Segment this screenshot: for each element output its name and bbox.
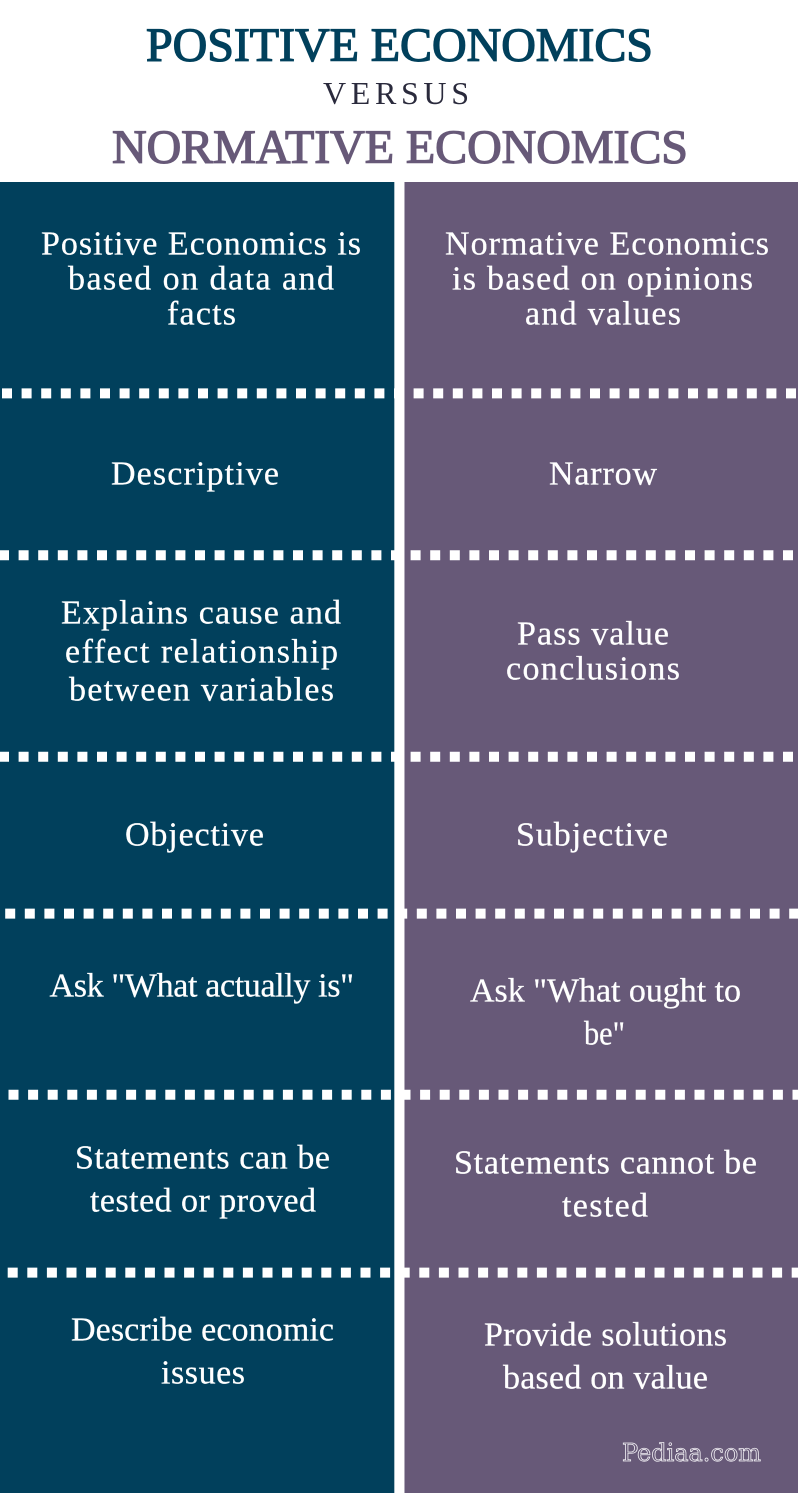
row 1 left: basis: facts — [167, 296, 236, 333]
row 7 left: economic issues: Describe economic — [71, 1312, 334, 1349]
row 5 right: what ought to be: be" — [584, 1016, 625, 1053]
panel: normative economics column — [404, 182, 798, 1493]
row 3 right: value conclusions: Pass value — [517, 616, 669, 653]
versus label: VERSUS — [323, 75, 469, 111]
row 3 left: cause and effect: effect relationship — [65, 634, 338, 671]
row 3 left: cause and effect: Explains cause and — [61, 595, 341, 632]
row 2 right: narrow: Narrow — [549, 456, 657, 493]
title: Positive Economics: POSITIVE ECONOMICS — [146, 19, 653, 72]
row 5 right: what ought to be — [470, 973, 741, 1053]
logo: Pediaa.com: Pediaa.com — [622, 1439, 761, 1467]
row 1 right: basis: and values — [525, 296, 681, 333]
row 4 left: objective: Objective — [125, 817, 264, 854]
row 5 right: what ought to be: Ask "What ought to — [470, 973, 741, 1010]
row 6 left: tested or proved: Statements can be — [75, 1140, 330, 1177]
row 7 right: solutions: Provide solutions — [484, 1317, 727, 1354]
row 1 left: basis: Positive Economics is — [41, 226, 361, 263]
row 6 left: tested or proved: tested or proved — [90, 1183, 316, 1220]
row 1 right: basis: Normative Economics — [445, 226, 769, 263]
row 2 left: descriptive: Descriptive — [111, 456, 279, 493]
title: Normative Economics: NORMATIVE ECONOMICS — [112, 121, 688, 174]
panel: positive economics column — [0, 182, 394, 1493]
row 6 left: tested or proved — [75, 1140, 330, 1220]
row 5 left: what actually is: Ask "What actually is" — [50, 968, 354, 1005]
row 6 right: cannot be tested: Statements cannot be — [454, 1145, 757, 1182]
row 7 right: solutions: based on value — [503, 1360, 708, 1397]
right column text — [445, 226, 769, 1397]
row 3 left: cause and effect — [61, 595, 341, 709]
row 3 right: value conclusions — [506, 616, 680, 688]
row 7 left: economic issues: issues — [161, 1355, 245, 1392]
row 1 left: basis: based on data and — [68, 261, 334, 298]
row 4 right: subjective: Subjective — [516, 817, 668, 854]
row 1 left: basis — [41, 226, 361, 333]
row 1 right: basis — [445, 226, 769, 333]
row 6 right: cannot be tested: tested — [562, 1188, 648, 1225]
row 3 right: value conclusions: conclusions — [506, 651, 680, 688]
row 7 right: solutions — [484, 1317, 727, 1397]
row 3 left: cause and effect: between variables — [69, 672, 334, 709]
left column text — [41, 226, 361, 1392]
row 7 left: economic issues — [71, 1312, 334, 1392]
row 6 right: cannot be tested — [454, 1145, 757, 1225]
row 1 right: basis: is based on opinions — [452, 261, 753, 298]
